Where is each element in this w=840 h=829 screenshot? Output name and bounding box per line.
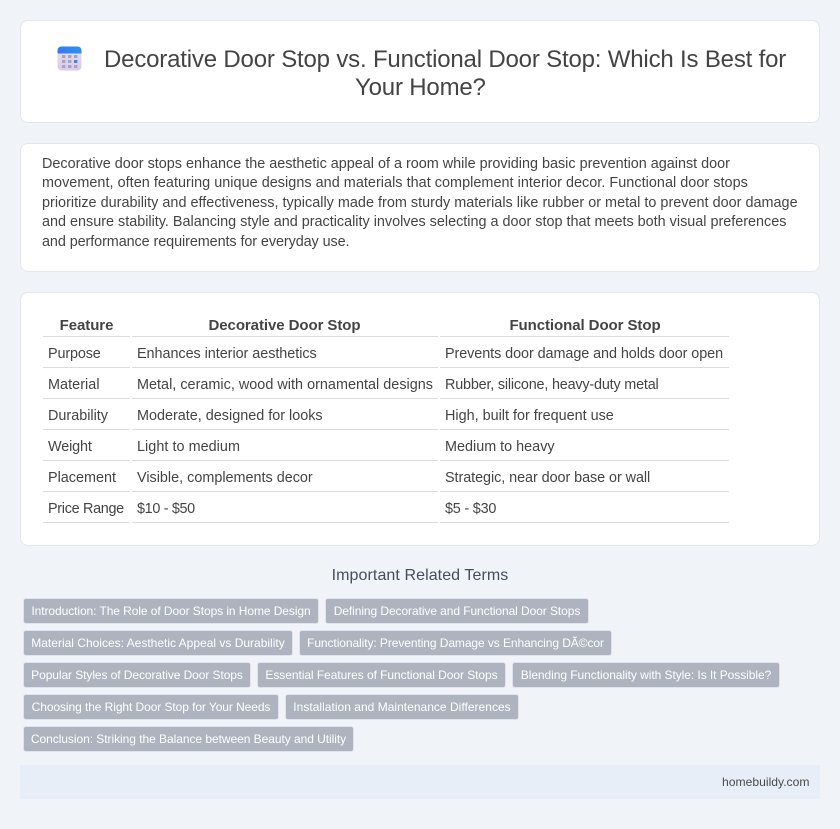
- table row: weight: [48, 439, 555, 455]
- footer: [20, 765, 820, 799]
- table row: material: Metal, ceramic, wood with ornamental designs: [137, 377, 433, 393]
- table row: weight: Weight: [48, 439, 92, 455]
- table row: weight: Medium to heavy: [445, 439, 555, 455]
- text block: intro: and performance requirements for everyday use.: [42, 234, 349, 250]
- table row: durability: Moderate, designed for looks: [137, 408, 323, 424]
- table row: purpose: [48, 346, 723, 362]
- related term tags: Introduction: The Role of Door Stops in Home Design: [31, 604, 311, 618]
- table row: material: [48, 377, 659, 393]
- text block: intro: prioritize durability and effectiveness, typically made from sturdy materials like rubber or metal to prevent door damage: [42, 195, 798, 211]
- table row: placement: [48, 470, 650, 486]
- related term tags: Popular Styles of Decorative Door Stops: [31, 668, 243, 682]
- related term tags: Conclusion: Striking the Balance between Beauty and Utility: [31, 732, 346, 746]
- title: Your Home?: [355, 74, 486, 101]
- panel: intro text: [20, 143, 820, 272]
- title: [104, 46, 786, 101]
- related term tags: Installation and Maintenance Differences: [293, 700, 511, 714]
- text block: intro: movement, often featuring unique designs and materials that complement interior decor. Functional door stops: [42, 175, 748, 191]
- table row: placement: Placement: [48, 470, 116, 486]
- related term tags: [23, 598, 780, 752]
- table header: [60, 317, 661, 334]
- table row: material: Material: [48, 377, 100, 393]
- table header: Decorative Door Stop: [209, 317, 360, 334]
- related term tags: Material Choices: Aesthetic Appeal vs Durability: [31, 636, 285, 650]
- text block: intro: [42, 156, 798, 250]
- table row: price range: $5 - $30: [445, 501, 496, 517]
- text block: intro: and ensure stability. Balancing style and practicality involves selecting a door stop that meets both visual preferences: [42, 214, 786, 230]
- related term tags: Essential Features of Functional Door Stops: [265, 668, 498, 682]
- table row: purpose: Prevents door damage and holds door open: [445, 346, 723, 362]
- table row: durability: High, built for frequent use: [445, 408, 614, 424]
- related term tags: Defining Decorative and Functional Door Stops: [334, 604, 580, 618]
- table header: Functional Door Stop: [509, 317, 661, 334]
- table row: purpose: Purpose: [48, 346, 101, 362]
- heading: related terms: Important Related Terms: [332, 567, 508, 584]
- table row: durability: Durability: [48, 408, 108, 424]
- table row: purpose: Enhances interior aesthetics: [137, 346, 317, 362]
- panel: title card: [20, 20, 820, 123]
- table row: placement: Visible, complements decor: [137, 470, 313, 486]
- table row: price range: [48, 501, 496, 517]
- table row: placement: Strategic, near door base or wall: [445, 470, 650, 486]
- related term tags: Blending Functionality with Style: Is It Possible?: [521, 668, 771, 682]
- table row: durability: [48, 408, 614, 424]
- icon: calendar: [58, 46, 82, 70]
- table row: material: Rubber, silicone, heavy-duty metal: [445, 377, 659, 393]
- related term tags: Choosing the Right Door Stop for Your Needs: [32, 700, 270, 714]
- table row: price range: Price Range: [48, 501, 124, 517]
- table header: Feature: [60, 317, 113, 334]
- related term tags: Functionality: Preventing Damage vs Enhancing DÃ©cor: [307, 636, 604, 650]
- title: Decorative Door Stop vs. Functional Door Stop: Which Is Best for: [104, 46, 786, 73]
- table row: price range: $10 - $50: [137, 501, 195, 517]
- panel: comparison table: [20, 292, 820, 546]
- table row: weight: Light to medium: [137, 439, 240, 455]
- text block: intro: Decorative door stops enhance the aesthetic appeal of a room while providing basic prevention against door: [42, 156, 730, 172]
- footer credit: homebuildy.com: [722, 775, 810, 789]
